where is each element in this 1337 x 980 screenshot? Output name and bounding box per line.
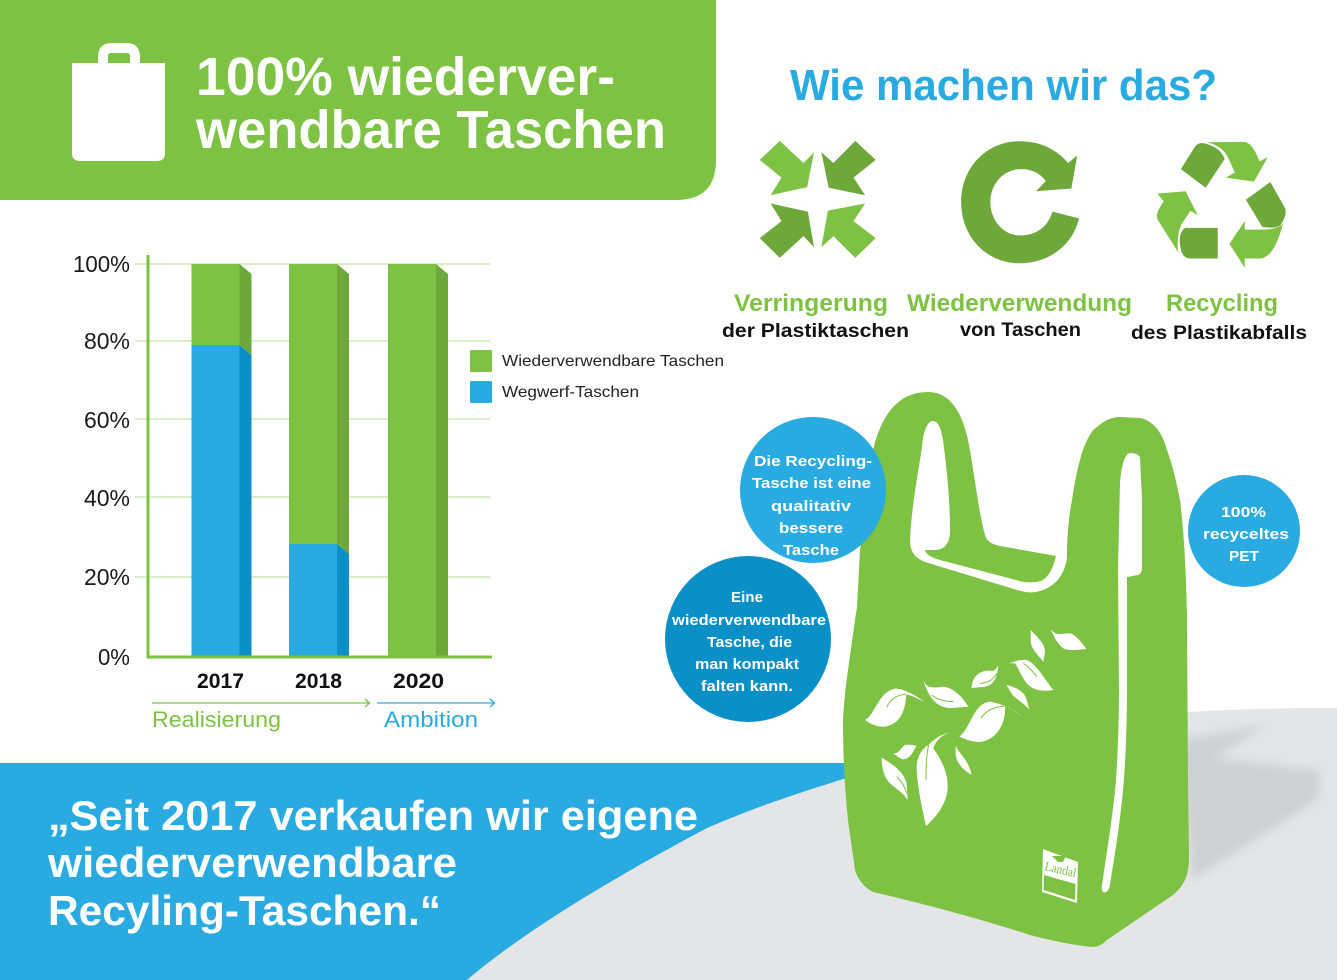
title: wendbare Taschen xyxy=(195,100,666,160)
icon: recycling symbol xyxy=(1157,142,1286,268)
bag side slit xyxy=(1102,453,1142,892)
bar 2017 xyxy=(192,264,252,657)
quote: „Seit 2017 verkaufen wir eigene xyxy=(48,792,698,839)
callout: recycled PET: PET xyxy=(1229,548,1259,565)
callout: compact foldable bag: Tasche, die xyxy=(707,634,792,651)
callout: recycled PET xyxy=(1188,475,1300,587)
y axis labels xyxy=(73,251,130,670)
callout: better quality bag: Tasche xyxy=(783,542,839,559)
y axis labels: 20% xyxy=(84,564,130,590)
bag logo: Landal: Landal xyxy=(1043,858,1078,880)
callout: recycled PET: 100% xyxy=(1221,504,1266,521)
caption: Verringerung: Verringerung xyxy=(734,290,888,317)
title: 100% wiederver- xyxy=(196,47,615,107)
callout: better quality bag: bessere xyxy=(779,520,843,537)
callout: better quality bag: Tasche ist eine xyxy=(752,475,871,492)
quote: Recyling-Taschen.“ xyxy=(48,887,441,934)
y axis labels: 100% xyxy=(73,251,130,277)
x axis years: 2018 xyxy=(295,670,342,693)
chart legend: Wiederverwendbare Taschen xyxy=(502,353,724,370)
x axis years: 2020 xyxy=(393,670,444,693)
bar 2020 xyxy=(388,264,448,657)
arrow: Ambition: Ambition xyxy=(384,707,478,732)
illustration: green reusable bag xyxy=(843,392,1189,947)
bar chart xyxy=(73,251,494,732)
caption: Verringerung: der Plastiktaschen xyxy=(722,321,909,342)
callout: compact foldable bag: Eine xyxy=(731,589,763,606)
icon: shopping bag xyxy=(72,43,165,161)
bag handle cut-out xyxy=(910,421,1067,592)
caption: Verringerung xyxy=(722,290,909,342)
caption: Recycling xyxy=(1131,290,1307,344)
caption: Recycling: Recycling xyxy=(1166,290,1278,317)
icon: reduction arrows xyxy=(760,141,876,258)
arrow: Ambition xyxy=(377,699,494,732)
chart legend xyxy=(470,350,724,403)
x axis years: 2017 xyxy=(197,670,244,693)
bag leaf pattern xyxy=(865,628,1087,826)
icon: reuse circular arrow xyxy=(961,141,1079,263)
arrow: Realisierung: Realisierung xyxy=(152,707,281,732)
x axis years xyxy=(197,670,444,693)
callout: compact foldable bag: wiederverwendbare xyxy=(671,612,826,629)
y axis labels: 40% xyxy=(84,485,130,511)
callout: compact foldable bag xyxy=(665,556,831,722)
heading: Wie machen wir das?: Wie machen wir das? xyxy=(790,61,1217,110)
callout: compact foldable bag: falten kann. xyxy=(701,678,793,695)
quote band background xyxy=(0,763,860,980)
bag logo: Landal xyxy=(1042,849,1078,903)
caption: Wiederverwendung xyxy=(907,290,1132,341)
grey floor shape xyxy=(467,708,1337,980)
bar 2018 xyxy=(289,264,349,657)
chart legend: Wegwerf-Taschen xyxy=(502,384,639,401)
callout: better quality bag: qualitativ xyxy=(771,498,852,515)
title xyxy=(195,47,666,160)
y axis labels: 80% xyxy=(84,328,130,354)
y axis labels: 0% xyxy=(98,644,130,670)
bag shadow on floor xyxy=(1180,724,1320,880)
caption: Recycling: des Plastikabfalls xyxy=(1131,323,1307,344)
arrow: Realisierung xyxy=(152,699,370,732)
caption: Wiederverwendung: Wiederverwendung xyxy=(907,290,1132,317)
callout: compact foldable bag: man kompakt xyxy=(695,656,799,673)
callout: recycled PET: recyceltes xyxy=(1203,526,1289,543)
caption: Wiederverwendung: von Taschen xyxy=(960,320,1081,341)
header panel xyxy=(0,0,716,200)
quote: wiederverwendbare xyxy=(47,839,457,886)
y axis labels: 60% xyxy=(84,407,130,433)
callout: better quality bag xyxy=(740,417,886,563)
quote xyxy=(47,792,698,934)
callout: better quality bag: Die Recycling- xyxy=(754,453,872,470)
